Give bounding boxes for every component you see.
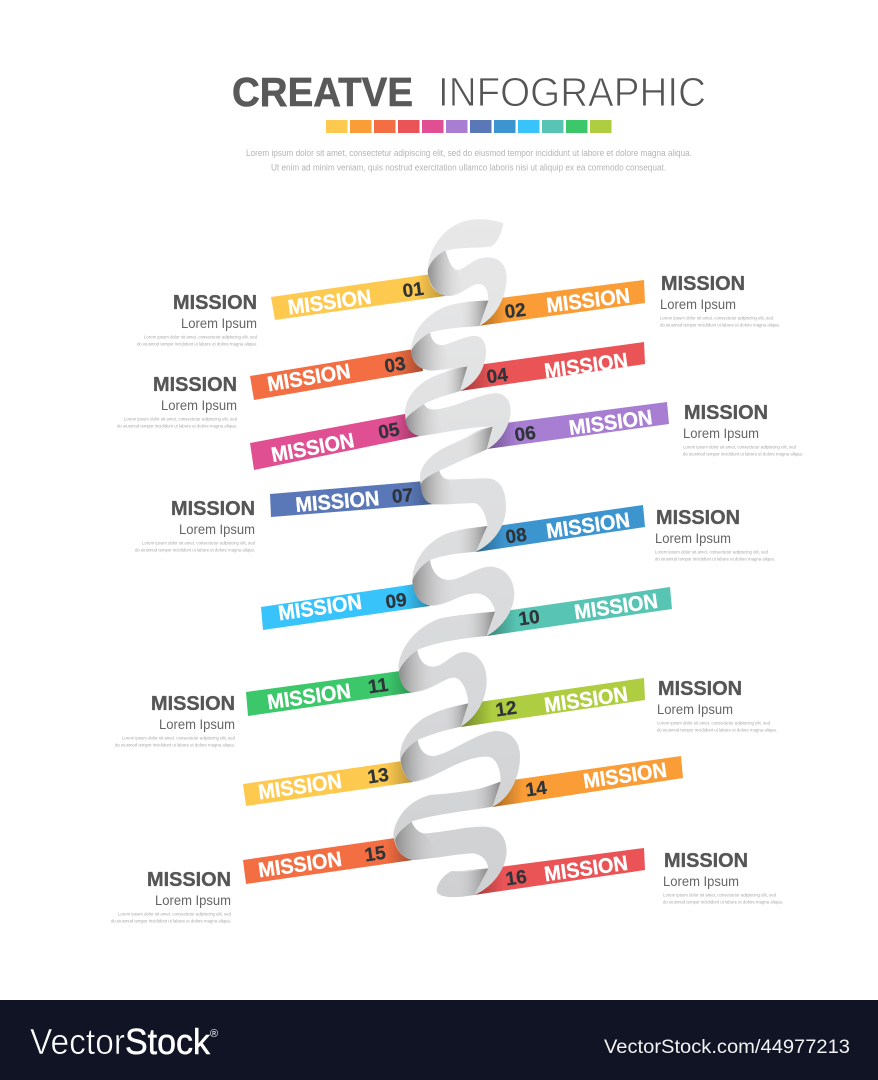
banner 04: 04 [485, 365, 510, 388]
banner 08 [476, 505, 645, 552]
banner 15: 15 [363, 843, 388, 866]
left label: mission group 1: Lorem ipsum dolor sit amet, consectetur adipiscing elit, sed [144, 334, 257, 340]
left label: mission group 3: do eiusmod tempor incididunt ut labore et dolore magna aliqua. [135, 548, 255, 552]
banner 07: 07 [391, 485, 414, 508]
title: INFOGRAPHIC [438, 69, 706, 115]
banner 02: MISSION [545, 285, 631, 318]
banner 13 [243, 761, 413, 806]
banner 11 [246, 671, 415, 716]
intro text: Ut enim ad minim veniam, quis nostrud exercitation ullamco laboris nisi ut aliquip ex ea commodo consequat. [271, 162, 666, 172]
left label: mission group 3 [135, 497, 255, 552]
left label: mission group 5: Lorem ipsum dolor sit amet, consectetur adipiscing elit, sed [118, 912, 231, 916]
banner 04 [460, 342, 645, 391]
left label: mission group 2: do eiusmod tempor incididunt ut labore et dolore magna aliqua. [117, 424, 237, 428]
left label: mission group 3: Lorem ipsum dolor sit amet, consectetur adipiscing elit, sed [142, 540, 255, 546]
banner 09 [261, 584, 430, 630]
footer bar: ® [210, 1028, 218, 1040]
right label: mission group 3: MISSION [656, 506, 740, 529]
banner 02: 02 [504, 300, 527, 323]
banner 03: MISSION [266, 360, 352, 396]
right label: mission group 1: Lorem Ipsum [660, 296, 736, 312]
right label: mission group 1 [660, 272, 780, 328]
ribbon banners 01 to 16 [243, 272, 683, 895]
banner 06: MISSION [568, 406, 654, 440]
banner 09: MISSION [277, 591, 363, 625]
right label: mission group 3: do eiusmod tempor incididunt ut labore et dolore magna aliqua. [655, 556, 775, 562]
title: CREATVE [232, 69, 413, 115]
banner 03 [250, 348, 423, 400]
banner 14: 14 [524, 778, 549, 801]
left label: mission group 4: do eiusmod tempor incididunt ut labore et dolore magna aliqua. [115, 742, 235, 748]
left label: mission group 1: MISSION [173, 291, 257, 314]
left label: mission group 1: do eiusmod tempor incididunt ut labore et dolore magna aliqua. [137, 342, 257, 346]
banner 04: MISSION [543, 349, 629, 383]
right label: mission group 2 [683, 401, 803, 456]
banner 12: 12 [494, 698, 518, 721]
right label: mission group 1: do eiusmod tempor incididunt ut labore et dolore magna aliqua. [660, 322, 780, 328]
banner 08: 08 [504, 525, 528, 548]
banner 01: 01 [401, 279, 426, 302]
banner 03: 03 [383, 353, 407, 378]
left label: mission group 3: MISSION [171, 497, 255, 520]
central grey spiral ribbon [393, 219, 520, 898]
banner 07 [270, 481, 435, 517]
banner 16 [474, 848, 645, 895]
left label: mission group 2: Lorem ipsum dolor sit amet, consectetur adipiscing elit, sed [124, 416, 237, 422]
right label: mission group 5: do eiusmod tempor incididunt ut labore et dolore magna aliqua. [663, 900, 783, 904]
banner 12: MISSION [543, 683, 629, 717]
banner 15: MISSION [257, 848, 343, 882]
banner 06: 06 [513, 423, 537, 446]
left label: mission group 4: Lorem Ipsum [159, 716, 235, 732]
banner 10 [487, 587, 672, 636]
footer bar: VectorStock.com/44977213 [604, 1037, 850, 1058]
banner 05 [250, 413, 420, 470]
banner 15 [243, 838, 413, 884]
banner 01 [271, 272, 445, 320]
banner 13: MISSION [257, 770, 343, 804]
banner 07: MISSION [295, 487, 380, 517]
right label: mission group 3 [655, 506, 775, 562]
banner 05: MISSION [269, 429, 356, 467]
right label: mission group 3: Lorem ipsum dolor sit amet, consectetur adipiscing elit, sed [655, 550, 768, 554]
banner 01: MISSION [287, 286, 373, 319]
right label: mission group 3: Lorem Ipsum [655, 530, 731, 546]
left label: mission group 5: MISSION [147, 868, 231, 891]
footer bar: Vector [30, 1021, 125, 1062]
title [232, 69, 706, 115]
right label: mission group 1: MISSION [661, 272, 745, 295]
right label: mission group 2: MISSION [684, 401, 768, 424]
right label: mission group 4 [657, 677, 777, 732]
intro text: Lorem ipsum dolor sit amet, consectetur adipiscing elit, sed do eiusmod tempor incididunt ut labore et dolore magna aliqua. [246, 148, 692, 158]
banner 05: 05 [377, 419, 402, 444]
right label: mission group 2: Lorem ipsum dolor sit amet, consectetur adipiscing elit, sed [683, 444, 796, 450]
left label: mission group 5: Lorem Ipsum [155, 892, 231, 908]
banner 09: 09 [384, 590, 408, 613]
banner 13: 13 [366, 765, 390, 788]
left label: mission group 4: Lorem ipsum dolor sit amet, consectetur adipiscing elit, sed [122, 736, 235, 740]
left label: mission group 1: Lorem Ipsum [181, 315, 257, 331]
left label: mission group 5: do eiusmod tempor incididunt ut labore et dolore magna aliqua. [111, 918, 231, 924]
banner 10: MISSION [573, 590, 659, 624]
banner 08: MISSION [545, 509, 631, 543]
left label: mission group 2: Lorem Ipsum [161, 397, 237, 413]
right label: mission group 5: Lorem Ipsum [663, 873, 739, 889]
left label: mission group 2 [117, 373, 237, 428]
right label: mission group 4: MISSION [658, 677, 742, 700]
colour swatch strip [326, 120, 612, 133]
right label: mission group 1: Lorem ipsum dolor sit amet, consectetur adipiscing elit, sed [660, 316, 773, 320]
right label: mission group 2: Lorem Ipsum [683, 425, 759, 441]
right label: mission group 5 [663, 849, 783, 904]
right label: mission group 4: Lorem Ipsum [657, 701, 733, 717]
banner 02 [478, 280, 645, 326]
left label: mission group 1 [137, 291, 257, 346]
footer bar [0, 1000, 878, 1080]
banner 14 [493, 756, 683, 807]
banner 06 [487, 402, 669, 449]
right label: mission group 5: Lorem ipsum dolor sit amet, consectetur adipiscing elit, sed [663, 892, 776, 898]
banner 16: 16 [504, 867, 528, 890]
left label: mission group 2: MISSION [153, 373, 237, 396]
left label: mission group 4: MISSION [151, 692, 235, 715]
left label: mission group 3: Lorem Ipsum [179, 521, 255, 537]
footer bar: Stock [125, 1021, 211, 1062]
banner 11: 11 [367, 675, 390, 698]
intro text [246, 148, 692, 172]
right label: mission group 5: MISSION [664, 849, 748, 872]
left label: mission group 4 [115, 692, 235, 748]
right label: mission group 2: do eiusmod tempor incididunt ut labore et dolore magna aliqua. [683, 452, 803, 456]
banner 12 [461, 678, 645, 727]
banner 10: 10 [517, 607, 541, 630]
left label: mission group 5 [111, 868, 231, 924]
banner 14: MISSION [582, 759, 668, 793]
banner 11: MISSION [266, 680, 352, 714]
right label: mission group 4: do eiusmod tempor incididunt ut labore et dolore magna aliqua. [657, 728, 777, 732]
banner 16: MISSION [543, 852, 629, 886]
right label: mission group 4: Lorem ipsum dolor sit amet, consectetur adipiscing elit, sed [657, 720, 770, 726]
